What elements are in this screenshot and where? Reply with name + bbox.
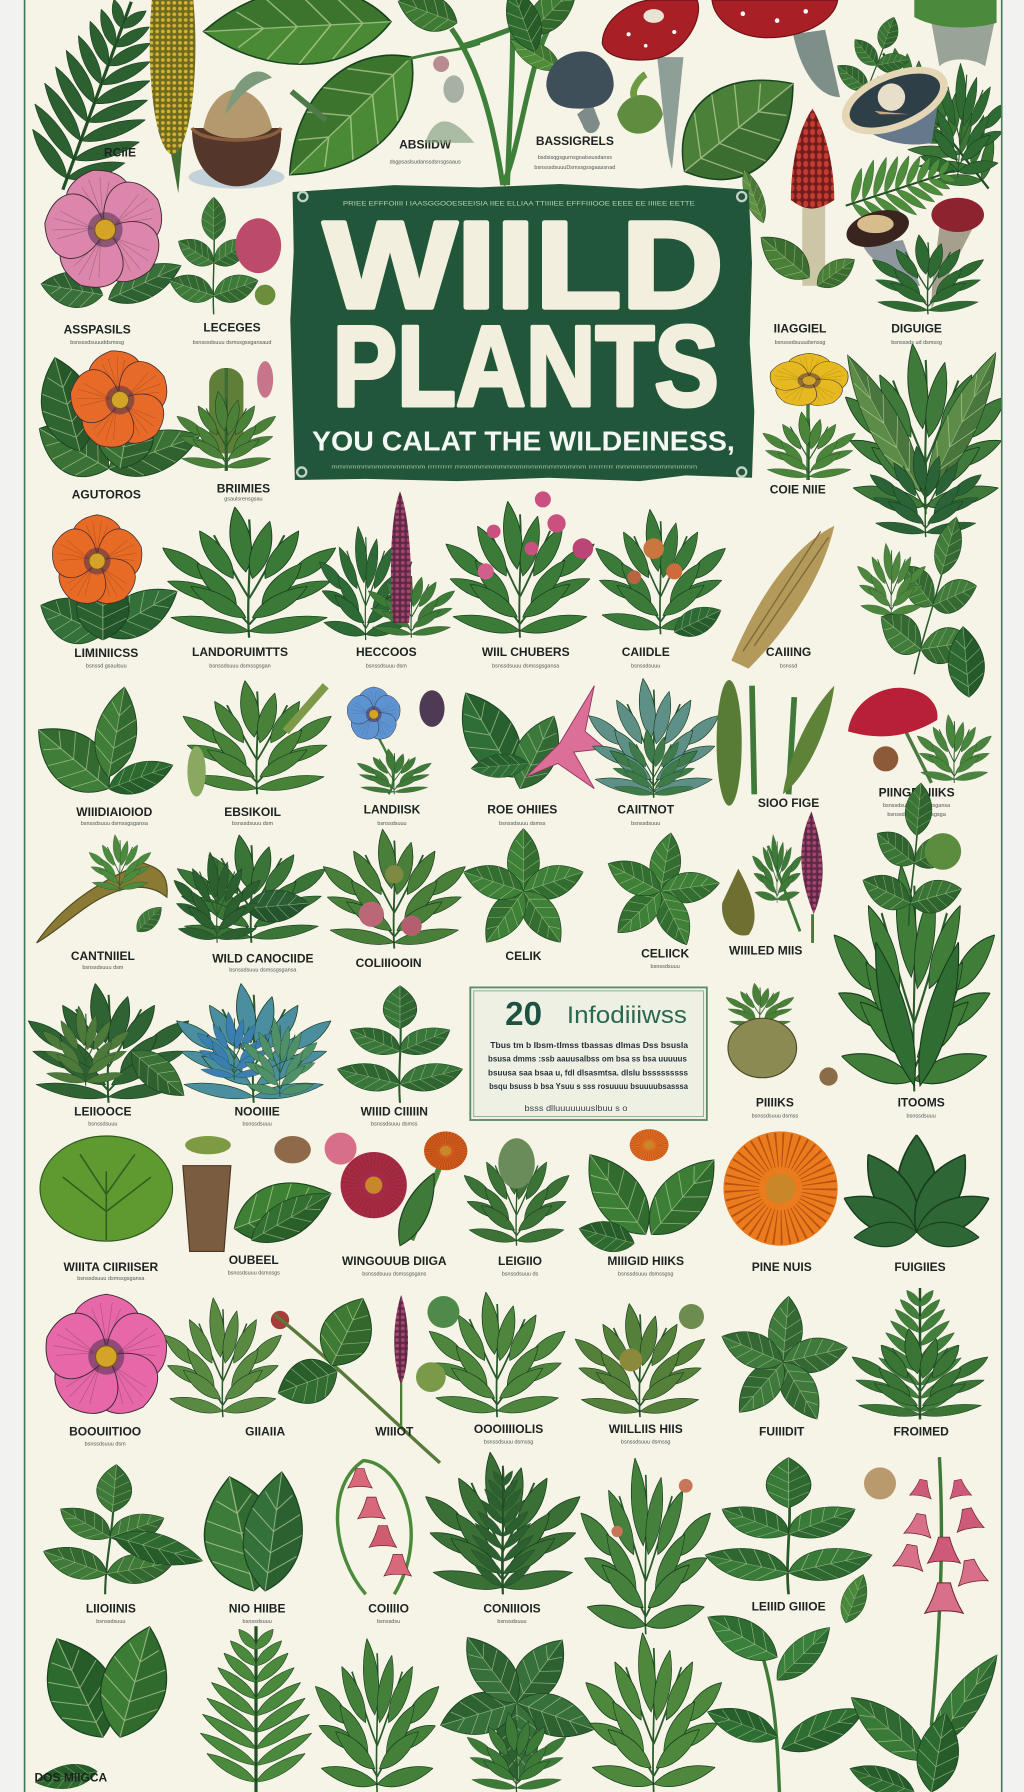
plant: green bud [617, 74, 663, 134]
plant: large spiky herb [833, 342, 1012, 537]
title banner [290, 184, 754, 481]
plant: sprig with pink cluster: bsnsssdsuuu dsmssgssgansaud [193, 340, 271, 346]
plant: thistle herb: LEIGIIO [498, 1254, 542, 1268]
right page margin [1002, 0, 1024, 1792]
plant: leafy branch: LIIOIINIS [86, 1602, 136, 1616]
plant: flowering bush [318, 828, 470, 970]
info box footnote: bsss dlluuuuuuuslbuu s o [525, 1104, 628, 1113]
plant: thistle herb [460, 1138, 573, 1277]
plant: pink flowering stems: bsnssdsuuu dsmssgsgansa [492, 663, 560, 669]
plant: star leaves [404, 1590, 631, 1792]
top row plants [7, 0, 1023, 346]
plant row 10 [28, 1571, 1010, 1792]
plant: star leaf two: bsnssdsuuu [651, 964, 680, 970]
plant: dense herbs [171, 834, 331, 973]
left page margin [0, 0, 25, 1792]
plant: cup with spinach leaves: bsnssdsuuu dsmssgs [228, 1270, 280, 1276]
plant: leafy branch [35, 1458, 206, 1625]
plant: tall right grasses: ITOOMS [898, 1095, 945, 1109]
plant: blue flower: bsnssdsuuu [377, 821, 407, 827]
plant: green herb: LANDORUIMTTS [192, 645, 288, 659]
plant: red spotted mushroom: PIINGE NIIKS [879, 786, 955, 800]
plant: light herb with red blooms: GIIAIIA [245, 1424, 285, 1438]
plant: large pink flower: bsnssdsuuu dsm [85, 1442, 126, 1448]
plant: mid herb with buds: bsnssdsuuu dsmssg [484, 1439, 533, 1445]
plant: dark needle herb: bsnssdsuuu [497, 1619, 527, 1625]
plant: big tropical leaves: ABSIIDW [399, 138, 452, 152]
plant: climbing vine right [855, 504, 1006, 699]
plant row 8 [37, 1288, 993, 1463]
info box body text: bsqu bsuss b bsa Ysuu s sss rosuuuu bsuuuubsasssa [489, 1082, 688, 1091]
plant: red torch flower: bsnsssdsuuudsmssg [775, 340, 825, 346]
plant: dotted herb: WIILLIIS HIIS [609, 1422, 683, 1436]
plant: snail-like nut: PIIIIKS [756, 1095, 794, 1109]
plant: fine herb [581, 1631, 726, 1792]
plant: orange flower: LIMINIICSS [74, 646, 138, 660]
plant: fern: RCiiE [104, 146, 136, 160]
plant: reddish stem herb [576, 1456, 715, 1635]
plant: star-leaf stem: bsnssdsuuu dsmss [371, 1122, 418, 1128]
plant: serrated fern [847, 1288, 993, 1438]
plant: red pom flower: WINGOUUB DIIGA [342, 1254, 447, 1268]
plant: stem with round leaves and purple spike: WIIIOT [375, 1424, 414, 1438]
plant: thin herb [311, 1637, 443, 1792]
plant: wheat sheaf: CAIIING [766, 645, 811, 659]
plant row 6 [23, 982, 838, 1128]
plant: serrated fern: FROIMED [893, 1424, 949, 1438]
plant: open funnel mushroom [832, 53, 957, 148]
plant: stem-top leaves [392, 0, 588, 79]
plant: pink flowering stems [441, 491, 599, 669]
plant: big dark leaves [28, 1618, 181, 1792]
plant: broad leaf cluster: bsnssdsuuu dsmssgsgansa [81, 821, 149, 827]
plant: fern [7, 0, 187, 210]
plant: small seed details [225, 56, 474, 143]
plant: hanging foxglove [893, 1457, 988, 1726]
plant: veined green leaf [657, 50, 820, 205]
plant: dotted herb [571, 1302, 709, 1445]
plant: thistle herb: bsnssdsuuu ds [502, 1271, 539, 1277]
plant: pink flowering stems: WIIL CHUBERS [482, 645, 570, 659]
plant: leaves with pink lily: bsnssdsuuu dsmss [499, 821, 546, 827]
plant: herb with red spike [316, 491, 458, 669]
plant: big tropical leaves [202, 0, 480, 204]
plant: large pink flower [37, 1294, 176, 1448]
title: PLANTS: PLANTS [333, 304, 719, 431]
plant: pink flower: bsnsssdsuuuddsmssg [70, 340, 124, 346]
plant: conical fern [196, 1626, 316, 1792]
banner top microtext: PRIEE EFFFOIIII I IAASGGOOESEEISIA IIEE ELLIAA TTIIIIEE EFFFIIIOOE EEEE EE IIIIEE EETTE [343, 201, 695, 208]
title: WILD: WIILD [323, 196, 723, 334]
plant: foxglove arc: bsnssdsu [377, 1619, 400, 1625]
plant: mid herb with buds [416, 1291, 570, 1445]
plant: leaves with pink lily [444, 681, 606, 827]
plant: flowering herb: gsaulsrensgsau [224, 497, 263, 503]
plant: red spotted mushroom [848, 688, 994, 818]
plant: capped mushrooms and grass: DIGUIGE [891, 322, 942, 336]
plant: right lower fern leaf [834, 135, 966, 241]
plant: herb with red spike: bsnssdsuuu dsm [366, 663, 407, 669]
plant: big tropical leaves: dsgpsaslsudanssdsnsgsaaus [390, 159, 461, 165]
plant: blue-grey mushroom: bsdsisqgsgurnsgoalssusdanss [538, 155, 612, 161]
plant: red mushroom right [712, 0, 840, 97]
plant: orange flower with leaves [27, 341, 207, 501]
plant: green herb [157, 506, 342, 669]
plant: red pom flower [325, 1131, 467, 1277]
plant: curved root [37, 834, 168, 971]
plant: oval leaf stem [699, 1571, 874, 1792]
plant: double big leaf: bsnssdsuuu [243, 1619, 272, 1625]
plant: mid herb with buds: OOOIIIIOLIS [474, 1422, 543, 1436]
plant: blue-grey mushroom: bsnsssdsuuuDsmssgssgaassnad [534, 165, 615, 171]
plant: flowering herb [173, 361, 279, 503]
plant: grass herb: EBSIKOIL [224, 805, 281, 819]
plant: star leaf two [590, 822, 731, 970]
plant: foxglove arc [337, 1461, 411, 1625]
plant: orange dandelion: PINE NUIS [752, 1260, 812, 1274]
plant: snail-like nut [724, 983, 838, 1120]
plant: pink flower [26, 156, 188, 346]
plant: orange flower [31, 515, 187, 669]
plant: top right foliage [826, 0, 1023, 216]
plant: leafy stem [698, 1457, 896, 1613]
plant: orange flower with leaves: AGUTOROS [72, 487, 141, 501]
plant: dark herb bush: bsnssdsuuu [88, 1122, 117, 1128]
plant row 7 [40, 1129, 996, 1282]
plant: reeds [717, 680, 834, 810]
plant: round cabbage leaf [40, 1136, 173, 1282]
plant: blue-grey mushroom [534, 51, 615, 171]
plant: tall right grasses: bsnssdsuuu [907, 1114, 936, 1120]
plant: dark needle herb [420, 1451, 585, 1625]
plant: dark herb bush: LEIIOOCE [74, 1104, 132, 1118]
plant: stem with round leaves and purple spike [271, 1288, 440, 1463]
plant: red pom flower: bsnssdsuuu dsmssgsgans [362, 1271, 427, 1277]
plant: dark needle herb: CONIIIOIS [483, 1602, 541, 1616]
plant: leaves with pink lily: ROE OHIIES [487, 803, 557, 817]
plant: pale blue herb: bsnssdsuuu [631, 821, 660, 827]
plant: leafy branch: bsnssdsuuu [96, 1619, 125, 1625]
plant: orange flower: bsnssd gsaulsuu [86, 663, 127, 669]
plant: broad leaf cluster: WIIIDIAIOIOD [76, 805, 153, 819]
plant: herb with red spike: HECCOOS [356, 645, 417, 659]
plant: reeds: SIOO FIGE [758, 796, 819, 810]
plant: grass herb: bsnssdsuuu dsm [232, 821, 274, 827]
plant: bottom right leaves [840, 1646, 1010, 1792]
plant: clover leaves [709, 1290, 857, 1438]
info box heading word: Infodiiiwss [567, 1002, 687, 1029]
banner background [290, 184, 754, 481]
plant: leafy stem: LEIIID GIIIOE [752, 1599, 826, 1613]
plant: pale blue herb: CAIITNOT [617, 803, 675, 817]
plant: serrated palmate leaf [837, 1135, 996, 1274]
plant: flowering herb: BRIIMIES [217, 482, 270, 496]
plant: dark herb bush [23, 982, 195, 1128]
plant: red mushroom left [602, 0, 699, 169]
plant: orange dandelion [723, 1131, 838, 1274]
plant: double big leaf: NIO HIIBE [229, 1602, 285, 1616]
plant: yellow catkin [150, 0, 195, 193]
plant: star leaf two: CELIICK [641, 947, 689, 961]
plant: nut in wooden bowl [189, 89, 285, 189]
info box body text: bsusa dmms :ssb aauusalbss om bsa ss bsa uuuuus [488, 1055, 687, 1064]
plant: dense herbs: bsnssdsuuu dsmssgsgansa [229, 967, 297, 973]
plant row 4 [22, 677, 994, 827]
plant: light herb with red blooms [160, 1297, 289, 1438]
plant: seed pod with spike: WIIILED MIIS [729, 943, 802, 957]
plant: leaves with orange bloom [571, 1129, 732, 1277]
plant row 3 [31, 491, 1006, 699]
plant: yellow flower [760, 353, 859, 497]
info box body text: Tbus tm b Ibsm-tlmss tbassas dlmas Dss bsusla [490, 1041, 688, 1050]
plant: round cabbage leaf: bsnssdsuuu dsmssgsgansa [77, 1276, 145, 1282]
banner bottom microtext: mmmmmmmmmmmmmmm rrrrrrrrrr mmmmmmmmmmmmmmmmmmmmm rrrrrrrrrr mmmmmmmmmmmmm [331, 465, 697, 471]
plant: star-leaf stem: WIIID CIIIIIN [361, 1104, 428, 1118]
plant: foxglove arc: COIIIIO [368, 1602, 409, 1616]
plant: big dark leaves: DOS MIIGCA [35, 1771, 108, 1785]
plant: seed pod with spike [722, 811, 823, 957]
plant: star leaf one [459, 829, 588, 963]
plant: dense herbs: WILD CANOCIIDE [212, 951, 314, 965]
plant: star leaf one: CELIK [505, 949, 542, 963]
plant: central stems [451, 0, 549, 185]
plant: wheat sheaf [731, 526, 834, 669]
plant: blue flower [343, 687, 445, 827]
info box body text [488, 1041, 688, 1091]
plant: leaves with orange bloom: bsnssdsuuu dsmssgsg [618, 1271, 673, 1277]
row of plants beside title, left [26, 156, 281, 503]
banner corner rivets [297, 192, 746, 477]
plant: clover leaves: FUIIIDIT [759, 1424, 805, 1438]
plant: red torch flower: IIAGGIEL [774, 322, 826, 336]
plant: wheat sheaf: bsnssd [780, 663, 797, 669]
info box heading number: 20 [505, 996, 542, 1033]
plant: blue herb [171, 982, 336, 1128]
plant: red torch flower [736, 109, 861, 346]
plant: grass herb [178, 680, 336, 827]
plant: yellow flower: COIE NIIE [770, 483, 826, 497]
plant: cup with spinach leaves: OUBEEL [229, 1253, 279, 1267]
plant: blue herb: NOOIIIE [234, 1104, 280, 1118]
plant: curved root: bsnssdsuuu dsm [82, 965, 124, 971]
subtitle: YOU CALAT THE WILDEINESS, [312, 425, 735, 456]
plant: blue herb: bsnssdsuuu [243, 1122, 272, 1128]
plant: red spotted mushroom: bsnssdsuuu dsmssgsga [887, 812, 947, 818]
plant: large pink flower: BOOUIITIOO [69, 1424, 141, 1438]
plant: dotted herb: bsnssdsuuu dsmssg [621, 1439, 670, 1445]
plant: cup with spinach leaves [183, 1136, 340, 1276]
plant: flowering bush: COLIIIOOIN [356, 956, 422, 970]
plant: blue-grey mushroom: BASSIGRELS [536, 134, 614, 148]
plant: tall right grasses [828, 778, 1000, 1120]
plant: pink flower: ASSPASILS [64, 323, 131, 337]
plant: green herb: bsnssdsuuu dsmssgsgan [209, 663, 271, 669]
plant: serrated palmate leaf: FUIGIIES [894, 1260, 946, 1274]
plant row 5 [37, 778, 1000, 1120]
plant: round cabbage leaf: WIIITA CIIRIISER [64, 1260, 159, 1274]
plant: snail-like nut: bsnssdsuuu dsmss [752, 1114, 798, 1120]
plants right of title [760, 342, 1012, 537]
plant: sprig with pink cluster [166, 197, 281, 346]
plant: pale blue herb [584, 677, 723, 827]
plant: herb with orange blooms: bsnssdsuuu [631, 663, 660, 669]
plant row 9 [35, 1451, 988, 1726]
plant: blue flower: LANDIISK [364, 803, 421, 817]
plant: double big leaf [192, 1468, 311, 1625]
plant: capped mushrooms and grass [842, 198, 987, 346]
info box: 20 ingredients [470, 987, 707, 1120]
plant: herb with orange blooms: CAIIDLE [622, 645, 670, 659]
plant: star-leaf stem [332, 986, 468, 1128]
plant: herb with orange blooms [591, 508, 730, 669]
plant: sprig with pink cluster: LECEGES [203, 320, 261, 334]
plant: curved root: CANTNIIEL [71, 949, 135, 963]
plant: red spotted mushroom: bsnssdsuuu dsmssgsgansa [883, 803, 951, 809]
info box body text: bsuusa saa bsaa u, fdl dlsasmtsa. dlslu bsssssssss [488, 1068, 688, 1077]
plant: broad leaf cluster [22, 684, 178, 827]
plant: leaves with orange bloom: MIIIGID HIIKS [607, 1254, 684, 1268]
plant: capped mushrooms and grass: bsnsssds ud dsmssg [891, 340, 942, 346]
